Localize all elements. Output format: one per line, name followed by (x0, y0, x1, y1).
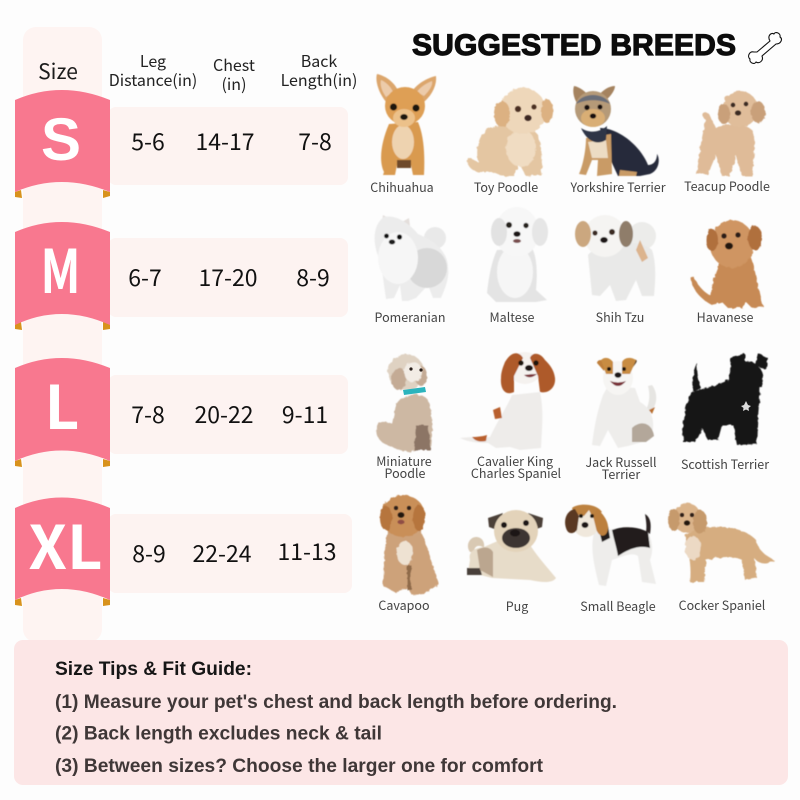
row: size XL: 11-13 (277, 533, 337, 567)
label: maltese: Maltese (490, 307, 535, 326)
label: small beagle: Small Beagle (580, 596, 656, 615)
label: shih tzu: Shih Tzu (596, 307, 644, 326)
title: SUGGESTED BREEDS (412, 29, 736, 62)
row: size L (15, 358, 348, 467)
dog: pug (467, 510, 556, 582)
tip heading: Size Tips & Fit Guide: (55, 658, 252, 680)
dog: chihuahua (376, 74, 436, 175)
dog: pomeranian (375, 215, 448, 301)
label: miniature poodle: Miniature (376, 451, 432, 470)
label: jack russell terrier: Terrier (602, 464, 640, 483)
face: teacup poodle (731, 102, 748, 116)
dog: cocker spaniel (668, 503, 774, 582)
label: cavapoo: Cavapoo (378, 595, 430, 614)
panel: size tips and fit guide (14, 640, 788, 785)
face: havanese (722, 232, 740, 249)
dog: shih tzu (575, 215, 656, 301)
label: jack russell terrier: Jack Russell (585, 452, 657, 471)
face: toy poodle (515, 104, 536, 121)
row: size M: 6-7 (128, 259, 162, 293)
row: size L: 7-8 (131, 396, 165, 430)
label: cavalier king charles spaniel: Charles Spaniel (471, 463, 561, 482)
row: size L: 20-22 (194, 396, 254, 430)
column heading: chest: Chest (213, 52, 255, 76)
column heading: back length: Back (301, 48, 337, 72)
row: size S: S (41, 106, 81, 173)
row: size M: 8-9 (296, 259, 330, 293)
face and collar: miniature poodle (403, 367, 426, 395)
column heading: back length: Length(in) (281, 67, 357, 91)
label: miniature poodle: Poodle (385, 463, 426, 482)
label: scottish terrier: Scottish Terrier (681, 454, 769, 473)
face: cocker spaniel (680, 513, 694, 526)
row: size L: 9-11 (282, 396, 328, 430)
face: cavapoo (394, 506, 411, 524)
row: size S: 14-17 (195, 123, 255, 157)
column heading: leg distance: Leg (140, 48, 166, 72)
row: size XL: 22-24 (192, 535, 252, 569)
label: pug: Pug (506, 596, 528, 615)
dog: small beagle (565, 505, 656, 586)
label: toy poodle: Toy Poodle (474, 177, 538, 196)
label: cavalier king charles spaniel: Cavalier King (477, 451, 553, 470)
label: cocker spaniel: Cocker Spaniel (679, 595, 765, 614)
label: pomeranian: Pomeranian (375, 307, 445, 326)
column heading: chest: (in) (222, 71, 246, 95)
tip 2: (2) Back length excludes neck & tail (55, 722, 382, 744)
panel: size column (23, 27, 102, 642)
row: size M: M (40, 224, 80, 311)
row: size S: 7-8 (298, 123, 332, 157)
dog: havanese (691, 220, 763, 308)
row: size XL: XL (28, 500, 102, 587)
icon: bone (749, 33, 781, 63)
dog: maltese (487, 207, 548, 302)
tip 3: (3) Between sizes? Choose the larger one for comfort (55, 755, 543, 777)
dog: teacup poodle (696, 91, 765, 176)
dog: cavalier king charles spaniel (460, 352, 555, 450)
heading: size: Size (38, 56, 78, 86)
row: size XL (15, 498, 352, 606)
dog: toy poodle (467, 88, 553, 176)
row: size M (15, 222, 348, 330)
dog: miniature poodle (376, 354, 432, 452)
label: teacup poodle: Teacup Poodle (684, 176, 770, 195)
column heading: leg distance: Distance(in) (109, 67, 197, 91)
row: size M: 17-20 (198, 259, 258, 293)
dog: yorkshire terrier (573, 86, 659, 176)
label: yorkshire terrier: Yorkshire Terrier (569, 177, 666, 196)
row: size XL: 8-9 (132, 535, 166, 569)
tag: scottish terrier (741, 401, 751, 411)
row: size S: 5-6 (131, 123, 165, 157)
tip 1: (1) Measure your pet's chest and back length before ordering. (55, 691, 617, 713)
dog: jack russell terrier (592, 358, 656, 448)
label: havanese: Havanese (697, 307, 753, 326)
dog: scottish terrier (683, 353, 768, 445)
row: size L: L (45, 360, 79, 447)
label: chihuahua: Chihuahua (370, 177, 434, 196)
row: size S (15, 90, 348, 198)
dog: cavapoo (380, 495, 439, 595)
